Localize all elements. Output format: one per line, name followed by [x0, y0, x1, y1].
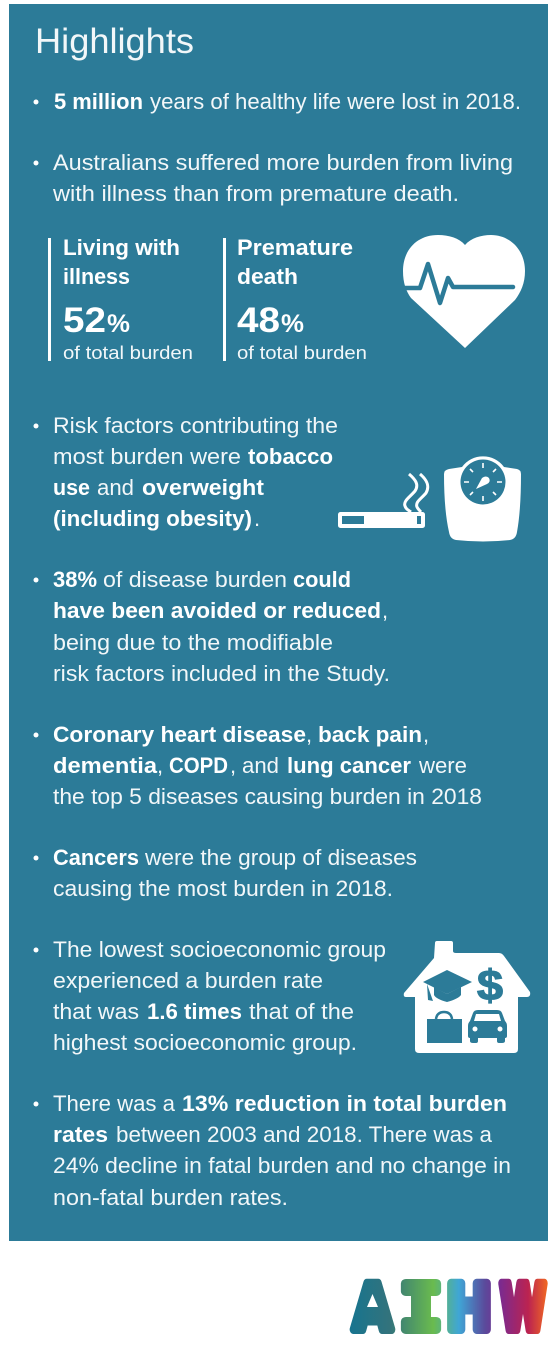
- bullet: cancers: [34, 845, 417, 901]
- stat: premature death 48%: [223, 235, 367, 363]
- bullet: reduction in total burden: non-fatal burden rates.: [53, 1185, 288, 1210]
- bullet: risk factors: overweight: [142, 475, 265, 500]
- bullet: living with illness versus premature death: Australians suffered more burden from living: [53, 150, 513, 175]
- bullet: reduction in total burden: rates: [53, 1122, 108, 1147]
- title: Highlights: [35, 22, 194, 61]
- stat: premature death 48%: %: [281, 310, 304, 338]
- bullet: 5 million years: years of healthy life were lost in 2018.: [150, 89, 521, 114]
- stat: living with illness 52%: 52: [63, 301, 106, 340]
- bullet: living with illness versus premature death: [34, 150, 513, 206]
- bullet: top 5 diseases: ,: [230, 753, 236, 778]
- stat: premature death 48%: 48: [237, 301, 280, 340]
- stat: premature death 48%: of total burden: [237, 343, 367, 363]
- bullet: risk factors: tobacco: [248, 444, 333, 469]
- stat: living with illness 52%: Living with: [63, 235, 180, 260]
- bullet: socioeconomic group: 1.6 times: [147, 999, 242, 1024]
- bullet: top 5 diseases: Coronary heart disease: [53, 722, 306, 747]
- bullet: reduction in total burden: between 2003 and 2018. There was a: [116, 1122, 493, 1147]
- bullet: 38% avoidable burden: have been avoided or reduced: [53, 598, 381, 623]
- logo: AIHW: H: [446, 1272, 492, 1344]
- icon: weighing scale: [444, 456, 521, 542]
- bullet: risk factors: and: [97, 475, 134, 500]
- bullet: socioeconomic group: that was: [53, 999, 139, 1024]
- bullet: top 5 diseases: and: [242, 753, 279, 778]
- icon: heart with pulse line: [403, 235, 525, 348]
- icon: cigarette: [338, 474, 428, 528]
- bullet: 38% avoidable burden: of disease burden: [103, 567, 287, 592]
- icon: house with cap, dollar, briefcase and car: $: [477, 962, 503, 1010]
- bullet: top 5 diseases: [34, 722, 482, 809]
- bullet: reduction in total burden: [34, 1091, 511, 1210]
- bullet: reduction in total burden: There was a: [53, 1091, 176, 1116]
- stat: living with illness 52%: illness: [63, 264, 130, 289]
- logo: AIHW: A: [353, 1272, 392, 1344]
- bullet: socioeconomic group: highest socioeconomic group.: [53, 1030, 357, 1055]
- stat: living with illness 52%: %: [107, 310, 130, 338]
- bullet: 38% avoidable burden: ,: [382, 598, 388, 623]
- bullet: top 5 diseases: were: [418, 753, 467, 778]
- bullet: reduction in total burden: 13% reduction in total burden: [182, 1091, 507, 1116]
- bullet: top 5 diseases: ,: [423, 722, 429, 747]
- bullet: risk factors: [34, 413, 338, 531]
- bullet: socioeconomic group: The lowest socioeconomic group: [53, 937, 386, 962]
- bullet: risk factors: (including obesity): [53, 506, 252, 531]
- bullet: risk factors: most burden were: [53, 444, 241, 469]
- bullet: 38% avoidable burden: risk factors included in the Study.: [53, 661, 390, 686]
- bullet: socioeconomic group: that of the: [249, 999, 354, 1024]
- logo: AIHW: I: [400, 1272, 442, 1344]
- logo: AIHW: [353, 1272, 546, 1344]
- stat: premature death 48%: Premature: [237, 235, 353, 260]
- bullet: top 5 diseases: ,: [157, 753, 163, 778]
- bullet: socioeconomic group: [34, 937, 386, 1055]
- bullet: risk factors: Risk factors contributing the: [53, 413, 338, 438]
- bullet: reduction in total burden: 24% decline in fatal burden and no change in: [53, 1153, 511, 1178]
- bullet: socioeconomic group: experienced a burden rate: [53, 968, 323, 993]
- bullet: cancers: causing the most burden in 2018.: [53, 876, 393, 901]
- bullet: top 5 diseases: the top 5 diseases causing burden in 2018: [53, 784, 482, 809]
- bullet: 38% avoidable burden: 38%: [53, 567, 97, 592]
- bullet: top 5 diseases: dementia: [53, 753, 158, 778]
- bullet: 38% avoidable burden: could: [293, 567, 351, 592]
- bullet: cancers: were the group of diseases: [144, 845, 417, 870]
- icon: house with cap, dollar, briefcase and car: [404, 941, 530, 1053]
- bullet: top 5 diseases: COPD: [169, 753, 228, 778]
- bullet: 38% avoidable burden: [34, 567, 390, 686]
- bullet: risk factors: use: [53, 475, 90, 500]
- stat: premature death 48%: death: [237, 264, 298, 289]
- bullet: top 5 diseases: ,: [306, 722, 312, 747]
- bullet: cancers: Cancers: [53, 845, 139, 870]
- bullet: living with illness versus premature death: with illness than from premature death.: [52, 181, 459, 206]
- bullet: 38% avoidable burden: being due to the modifiable: [53, 630, 333, 655]
- bullet: risk factors: .: [254, 506, 260, 531]
- bullet: top 5 diseases: lung cancer: [287, 753, 411, 778]
- bullet: 5 million years: 5 million: [54, 89, 143, 114]
- stat: living with illness 52%: [48, 235, 193, 363]
- stat: living with illness 52%: of total burden: [63, 343, 193, 363]
- bullet: top 5 diseases: back pain: [318, 722, 422, 747]
